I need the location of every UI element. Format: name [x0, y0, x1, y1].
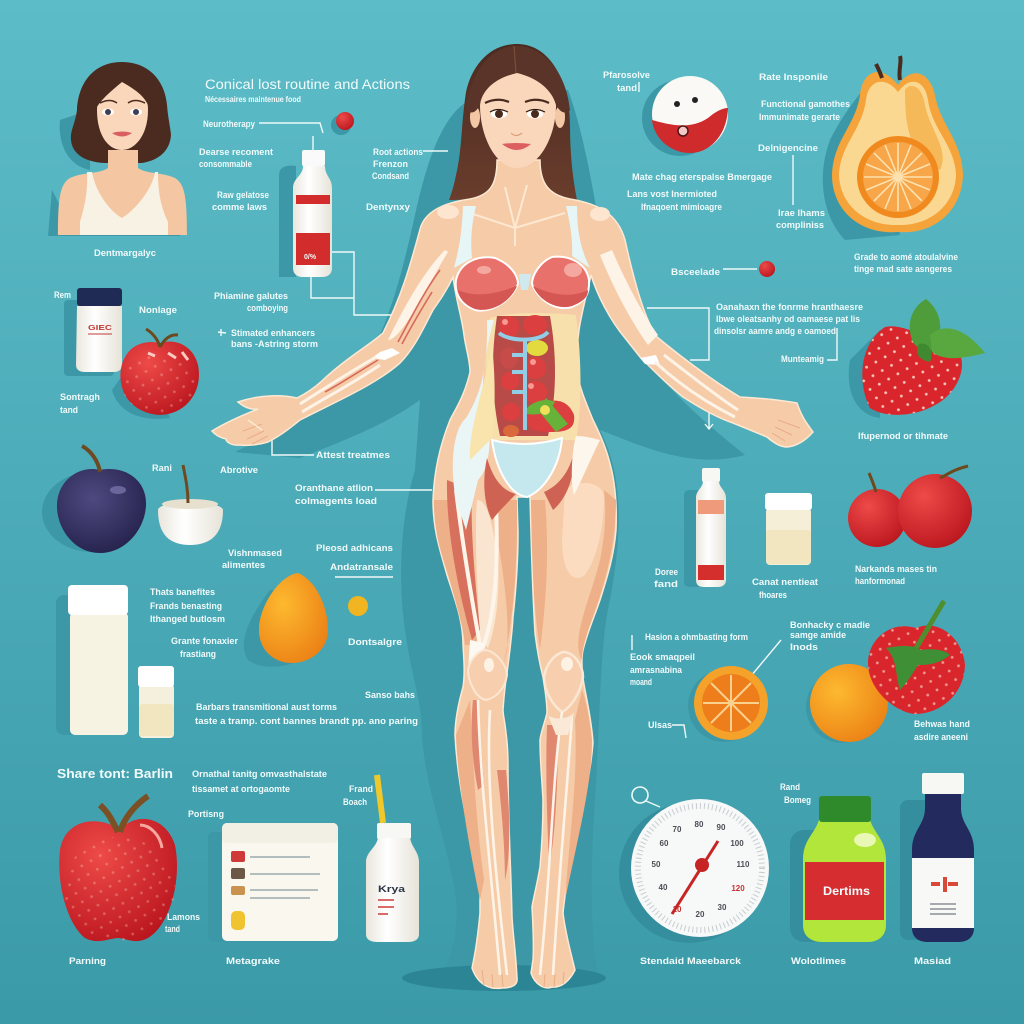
icon: orange slice	[688, 666, 768, 742]
eyes, brows, nose and lips	[485, 100, 549, 150]
text: raw gelatose: Raw gelatose	[217, 190, 269, 201]
title block	[205, 77, 410, 104]
icon: navy bottle	[900, 773, 974, 942]
toes	[482, 970, 564, 987]
text: lamons: tand	[165, 924, 180, 935]
text: doree	[654, 567, 678, 590]
text: behwas	[914, 719, 970, 743]
blue vessels	[499, 332, 548, 430]
icon: red and white ball	[642, 76, 728, 156]
icon: plum	[42, 446, 146, 553]
text: vishnmased	[222, 548, 282, 571]
text: bonhacky: samge amide	[790, 630, 846, 641]
shin tendons	[478, 700, 572, 975]
text: bsceelade: Bsceelade	[671, 267, 720, 278]
icon: strawberry	[849, 299, 985, 418]
icon: yellow straw bottle	[366, 775, 419, 942]
text: thats banefites: Ithanged butlosm	[150, 614, 225, 625]
text: raw gelatose: comme laws	[212, 202, 267, 213]
text: rand: Bomeg	[784, 795, 811, 806]
chest	[456, 257, 589, 311]
text: pfarosolve: tand	[617, 83, 637, 94]
icon: small jar	[138, 666, 174, 738]
text: pfarosolve	[603, 70, 650, 94]
text: pfarosolve: Pfarosolve	[603, 70, 650, 81]
text: grade: tinge mad sate asngeres	[854, 264, 952, 275]
text: canat: fhoares	[759, 590, 787, 601]
white wrap	[453, 320, 494, 530]
icon: small white bottle	[684, 468, 726, 587]
text: grade	[854, 252, 958, 275]
icon: white bottle with red label: 0/%	[304, 254, 317, 261]
text: dearse	[199, 147, 274, 170]
text: neurotherapy: Neurotherapy	[203, 119, 256, 130]
icon: white bottle with red label	[279, 150, 332, 277]
text: dearse: consommable	[199, 159, 252, 170]
text: thats banefites	[150, 587, 225, 625]
text: frand: Boach	[343, 797, 367, 808]
shin muscles	[472, 700, 558, 880]
heading: share tont: Share tont: Barlin	[57, 767, 173, 781]
text: bonhacky: Inods	[790, 642, 818, 653]
text: phiamine: Phiamine galutes	[214, 291, 288, 302]
icon: big apple	[59, 796, 178, 943]
text: stendaid: Stendaid Maeebarck	[640, 956, 742, 967]
text: functional	[759, 99, 850, 123]
icon: gauge: 80	[695, 820, 704, 829]
text: vishnmased: alimentes	[222, 560, 265, 571]
shoulder highlights	[437, 205, 459, 219]
icon: tomato	[868, 601, 965, 714]
red ball	[331, 112, 354, 135]
text: grante: frastiang	[180, 649, 216, 660]
icon: green bottle: Dertims	[823, 884, 870, 898]
icon: white bowl	[158, 465, 223, 545]
hair front	[466, 46, 570, 112]
text: stimated	[231, 328, 318, 350]
text: ulsas: Ulsas	[648, 720, 672, 731]
hip strap	[572, 436, 600, 495]
text: rand	[780, 782, 811, 806]
icon: green bottle	[790, 796, 886, 942]
icon: label card	[208, 823, 338, 942]
leg shading	[434, 490, 616, 900]
thigh highlights	[562, 483, 604, 578]
text: pleosd: Andatransale	[330, 562, 393, 573]
text: lans: Lans vost Inermioted	[627, 189, 717, 200]
icon: small red ball	[759, 261, 775, 277]
figure shadow	[235, 90, 745, 985]
text: eook: moand	[630, 677, 652, 688]
text: hasion: Hasion a ohmbasting form	[645, 632, 748, 643]
text: ifupernod: Ifupernod or tihmate	[858, 431, 948, 442]
connector lines	[218, 82, 837, 738]
text: irae	[776, 208, 825, 231]
face	[480, 72, 556, 168]
text: stimated: Stimated enhancers	[231, 328, 315, 339]
text: oranthane: Oranthane atlion	[295, 483, 373, 494]
text: sontragh	[60, 392, 100, 416]
text: pleosd: Pleosd adhicans	[316, 543, 393, 554]
text: thats banefites: Thats banefites	[150, 587, 215, 598]
icon: gauge: 90	[717, 823, 726, 832]
text: ornathal: Ornathal tanitg omvasthalstate	[192, 769, 327, 780]
floor shadow	[402, 965, 606, 991]
icon: small cream jar	[765, 493, 812, 565]
right arm details	[600, 250, 800, 441]
text: rem: Rem	[54, 290, 71, 301]
icon: whole orange	[806, 664, 888, 743]
text: irae: Irae lhams	[778, 208, 825, 219]
blue briefs	[492, 438, 562, 497]
text: irae: compliniss	[776, 220, 824, 231]
thigh tendons	[456, 490, 497, 650]
icon: gauge: 20	[696, 910, 705, 919]
text: bonhacky	[790, 620, 870, 653]
text: nonlage: Nonlage	[139, 305, 177, 316]
text: eook: Eook smaqpeil	[630, 652, 695, 663]
text: oanahaxn	[714, 302, 863, 337]
icon: gauge: 70	[673, 825, 682, 834]
icon: navy lid jar: GIEC	[88, 323, 113, 332]
icon: gauge: 110	[737, 860, 750, 869]
icon: gauge: 120	[731, 884, 745, 893]
central body figure	[212, 44, 813, 988]
text: dentynxy: Dentynxy	[366, 202, 411, 213]
hair back	[449, 44, 577, 200]
icon: gauge: 30	[718, 903, 727, 912]
text: lans	[627, 189, 722, 213]
text: oranthane: colmagents load	[295, 496, 377, 507]
text: lans: Ifnaqoent mimioagre	[641, 202, 722, 213]
icon: gauge: 50	[652, 860, 661, 869]
text: wolotlimes: Wolotlimes	[791, 956, 846, 967]
text: narkands: Narkands mases tin	[855, 564, 937, 575]
text: canat: Canat nentieat	[752, 577, 819, 588]
text: parning: Parning	[69, 956, 106, 967]
icon: tall white bottle	[56, 585, 128, 735]
text: ornathal: tissamet at ortogaomte	[192, 784, 290, 795]
text: lamons: Lamons	[167, 912, 200, 923]
inner thigh muscle	[484, 452, 574, 520]
text: vishnmased: Vishnmased	[228, 548, 282, 559]
text: ornathal	[192, 769, 327, 795]
text: barbars: Barbars transmitional aust torms	[196, 702, 337, 713]
text: frand: Frand	[349, 784, 373, 795]
text: munteamig: Munteamig	[781, 354, 824, 365]
text: pleosd	[316, 543, 393, 573]
text: attest: Attest treatmes	[316, 450, 390, 461]
text: masiad: Masiad	[914, 956, 951, 967]
text: phiamine	[214, 291, 288, 314]
icon: red apple	[112, 329, 199, 419]
text: oranthane	[295, 483, 377, 507]
icon: gauge: 10	[673, 905, 682, 914]
icon: yellow straw bottle: Krya	[378, 884, 406, 895]
text: rate insponile: Rate Insponile	[759, 72, 828, 83]
text: metagrake: Metagrake	[226, 956, 280, 967]
text: functional: Functional gamothes	[761, 99, 850, 110]
icon: gauge: 60	[660, 839, 669, 848]
text: delnigencine: Delnigencine	[758, 143, 818, 154]
text: canat	[752, 577, 819, 601]
text: lamons	[165, 912, 200, 935]
title block: Conical lost routine and Actions	[205, 77, 410, 92]
left arm details	[243, 250, 448, 444]
icon: gauge: 100	[730, 839, 744, 848]
text: abrotive: Abrotive	[220, 465, 258, 476]
text: eook	[630, 652, 695, 688]
text: sontragh: Sontragh	[60, 392, 100, 403]
text: thats banefites: Frands benasting	[150, 601, 222, 612]
organs	[499, 315, 574, 437]
cavity	[486, 313, 580, 440]
icon: gauge: 40	[659, 883, 668, 892]
icon: yellow ball	[348, 596, 368, 616]
text: raw gelatose	[212, 190, 269, 213]
text: grade: Grade to aomé atoulalvine	[854, 252, 958, 263]
text: narkands: hanformonad	[855, 576, 905, 587]
text: sanso: Sanso bahs	[365, 690, 415, 701]
text: oanahaxn: dinsolsr aamre andg e oamoed	[714, 326, 836, 337]
text: oanahaxn: Ibwe oleatsanhy od oamaese pat lis	[716, 314, 860, 325]
text: narkands	[855, 564, 937, 587]
text: root actions: Frenzon	[373, 159, 408, 170]
text: root actions: Condsand	[372, 171, 409, 182]
portrait	[48, 62, 187, 236]
text: root actions: Root actions	[373, 147, 423, 158]
text: functional: Immunimate gerarte	[759, 112, 840, 123]
title block: Nécessaires maintenue food	[205, 94, 301, 104]
text: frand	[343, 784, 373, 808]
straps	[454, 206, 590, 268]
text: behwas: asdire aneeni	[914, 732, 968, 743]
text: portisng: Portisng	[188, 809, 224, 820]
text: rani: Rani	[152, 463, 172, 474]
text: oanahaxn: Oanahaxn the fonrme hranthaesre	[716, 302, 863, 313]
text: grante	[171, 636, 238, 660]
text: eook: amrasnabina	[630, 665, 683, 676]
text: behwas: Behwas hand	[914, 719, 970, 730]
text: stimated: bans -Astring storm	[231, 339, 318, 350]
text: mate chag: Mate chag eterspalse Bmergage	[632, 172, 772, 183]
text: dontsalgre: Dontsalgre	[348, 637, 402, 648]
icon: halved pear with orange	[823, 56, 963, 240]
collar bones	[470, 185, 565, 246]
thigh muscle	[447, 480, 480, 640]
icon: orange drop	[244, 573, 328, 667]
text: doree: fand	[654, 579, 678, 590]
icon: gauge	[619, 787, 769, 943]
text: sontragh: tand	[60, 405, 78, 416]
text: doree: Doree	[655, 567, 678, 578]
text: dearse: Dearse recoment	[199, 147, 274, 158]
icon: cherries	[848, 466, 972, 548]
text: rand: Rand	[780, 782, 800, 793]
text: barbars	[195, 702, 418, 727]
body silhouette	[212, 160, 813, 988]
text: grante: Grante fonaxier	[171, 636, 238, 647]
icon: navy lid jar	[64, 288, 122, 376]
text: phiamine: comboying	[247, 303, 288, 314]
text: root actions	[372, 147, 423, 182]
text: barbars: taste a tramp. cont bannes brandt pp. ano paring	[195, 716, 418, 727]
label: portrait: Dentmargalyc	[94, 248, 156, 259]
knees	[468, 650, 507, 700]
text: bonhacky: Bonhacky c madie	[790, 620, 870, 631]
